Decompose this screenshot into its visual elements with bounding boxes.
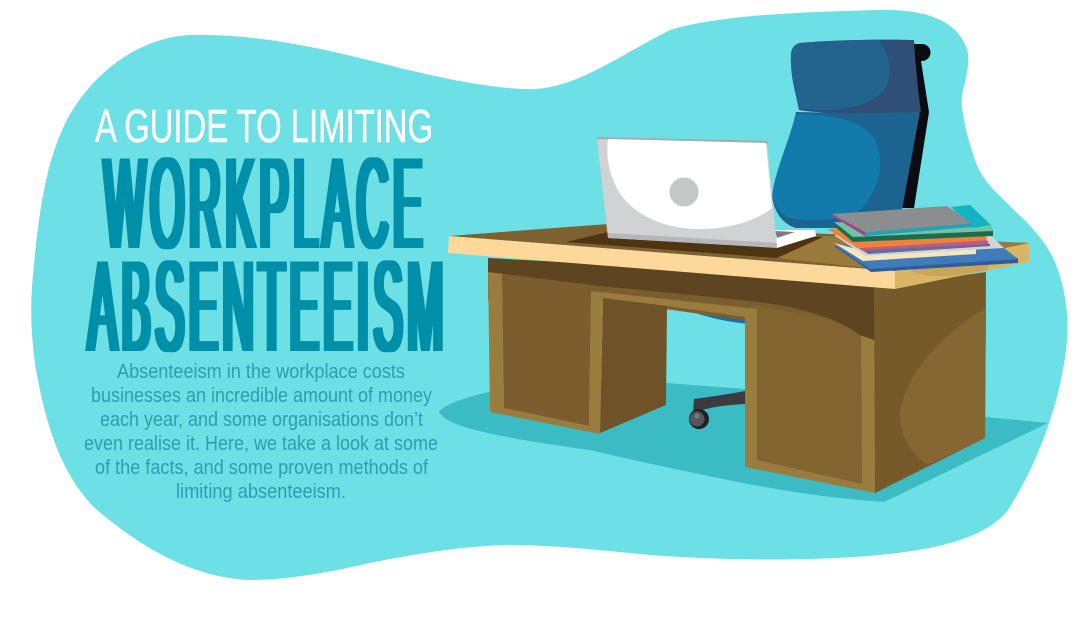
wheel <box>689 409 709 429</box>
left pedestal side <box>600 298 667 433</box>
desk top surface <box>449 224 1029 271</box>
cream folder <box>834 243 976 261</box>
desk underside shadow <box>488 258 895 340</box>
title line: a guide to limiting: A GUIDE TO LIMITING <box>95 100 433 152</box>
text: WORKPLACE <box>104 130 427 276</box>
laptop shadow on desk <box>566 232 823 258</box>
chair frame <box>902 44 930 208</box>
dark green folder edge <box>834 226 993 242</box>
right side highlight <box>900 308 986 465</box>
white pages <box>834 235 1004 256</box>
magenta edge <box>832 214 867 236</box>
intro paragraph: of the facts, and some proven methods of <box>95 457 428 479</box>
title <box>88 100 448 379</box>
laptop lid <box>597 138 777 247</box>
orange folder <box>827 228 987 248</box>
chair lower highlight <box>772 114 880 220</box>
right pedestal frame <box>745 309 875 493</box>
chair wheel and arm <box>689 391 745 429</box>
intro paragraph: even realise it. Here, we take a look at some <box>84 433 438 455</box>
desk surface lighter right side <box>777 236 1029 271</box>
shadow patch under folders <box>910 258 990 276</box>
lid top edge <box>597 137 768 144</box>
teal edge <box>865 223 972 236</box>
blue folder <box>834 246 1018 272</box>
laptop <box>597 137 816 248</box>
laptop bottom edge <box>608 233 777 248</box>
intro paragraph: each year, and some organisations don’t <box>100 409 423 431</box>
floor shadow <box>439 383 1048 502</box>
lid logo <box>670 178 698 206</box>
chair <box>680 40 930 324</box>
intro paragraph: Absenteeism in the workplace costs <box>117 361 405 383</box>
wheel arm <box>693 391 745 412</box>
desk right side <box>874 272 986 493</box>
teal tab folder <box>951 205 991 228</box>
green folder <box>834 222 993 237</box>
intro paragraph <box>84 361 438 503</box>
intro paragraph: businesses an incredible amount of money <box>91 385 432 407</box>
chair base under desk <box>680 300 750 324</box>
desk right edge <box>895 243 1029 289</box>
stack of folders <box>827 205 1018 272</box>
pink and purple pages <box>858 240 990 254</box>
desk left pedestal panel <box>488 262 874 426</box>
chair lower cushion <box>772 111 920 228</box>
desk <box>448 224 1029 493</box>
laptop keyboard base <box>775 230 816 248</box>
desk front edge <box>448 236 895 289</box>
chair upper cushion <box>791 40 921 113</box>
grey top folder <box>832 206 972 232</box>
desk centre beam <box>591 291 757 317</box>
intro paragraph: limiting absenteeism. <box>176 481 346 503</box>
right pedestal panel <box>750 305 866 488</box>
left pedestal frame <box>488 270 603 434</box>
lid white highlight <box>607 139 772 229</box>
chair upper highlight <box>791 40 890 110</box>
